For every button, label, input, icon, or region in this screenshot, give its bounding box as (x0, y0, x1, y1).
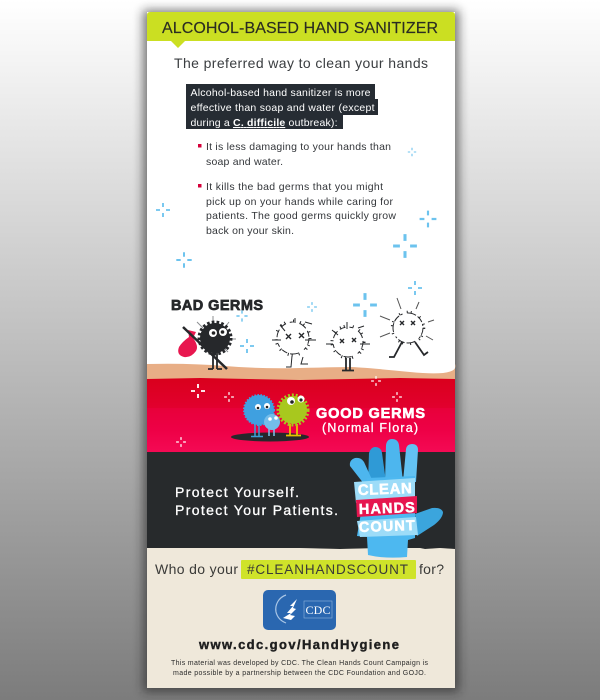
heading: good germs: GOOD GERMS (316, 406, 425, 422)
text: hashtag prompt: Who do your (155, 561, 238, 577)
text: footer credit: This material was developed by CDC. The Clean Hands Count Campaign is (171, 660, 428, 667)
icon: white sparkles (176, 376, 402, 447)
bullet list: pick up on your hands while caring for (206, 196, 394, 208)
text: hashtag prompt: for? (419, 561, 444, 577)
icon: dead germ 2 (326, 322, 370, 370)
icon: CDC logo: CDC (306, 603, 330, 617)
text: hashtag prompt (155, 560, 444, 579)
panel: white upper card (147, 12, 455, 452)
bullet list: soap and water. (206, 156, 283, 168)
ground: sand band (147, 364, 455, 380)
icon: dead germ 1 (272, 318, 316, 367)
title banner: ALCOHOL-BASED HAND SANITIZER (162, 20, 438, 37)
icon: clean hands count hand: COUNT (359, 518, 415, 536)
icon: clean hands count hand: CLEAN (358, 480, 412, 499)
title banner (147, 12, 455, 48)
bullet list: patients. The good germs quickly grow (206, 210, 396, 222)
icon: dead germ 3 (380, 298, 434, 357)
text: protect yourself: Protect Yourself. (175, 484, 299, 500)
callout: dark intro text (186, 84, 378, 129)
panel: red skin layer (147, 378, 455, 452)
text: footer credit (171, 660, 428, 677)
icon: clean hands count hand (350, 439, 443, 558)
heading: bad germs: BAD GERMS (171, 298, 263, 314)
bullet list: back on your skin. (206, 225, 294, 237)
text: url: www.cdc.gov/HandHygiene (198, 637, 399, 652)
icon: blue sparkles (156, 148, 436, 353)
callout: dark intro text: during a C. difficile outbreak): (190, 117, 338, 129)
heading: good germs (316, 406, 425, 435)
callout: dark intro text: effective than soap and water (except (190, 102, 375, 114)
bullet list: It is less damaging to your hands than (206, 141, 391, 153)
text: protect yourself (175, 484, 338, 518)
text: hashtag prompt: #CLEANHANDSCOUNT (247, 562, 408, 577)
subtitle: The preferred way to clean your hands (174, 55, 428, 71)
panel: dark band (147, 452, 455, 549)
icon: bad germ with bundle (178, 316, 236, 369)
icon: CDC logo (263, 590, 336, 630)
callout: dark intro text: Alcohol-based hand sanitizer is more (190, 87, 371, 99)
bullet list (198, 141, 396, 237)
heading: good germs: (Normal Flora) (322, 421, 418, 435)
text: footer credit: made possible by a partnership between the CDC Foundation and GOJO. (173, 670, 426, 677)
icon: good germs (231, 395, 309, 442)
bullet list: It kills the bad germs that you might (206, 181, 383, 193)
panel: cream footer (147, 548, 455, 688)
icon: clean hands count hand: HANDS (359, 500, 415, 518)
text: protect yourself: Protect Your Patients. (175, 502, 338, 518)
